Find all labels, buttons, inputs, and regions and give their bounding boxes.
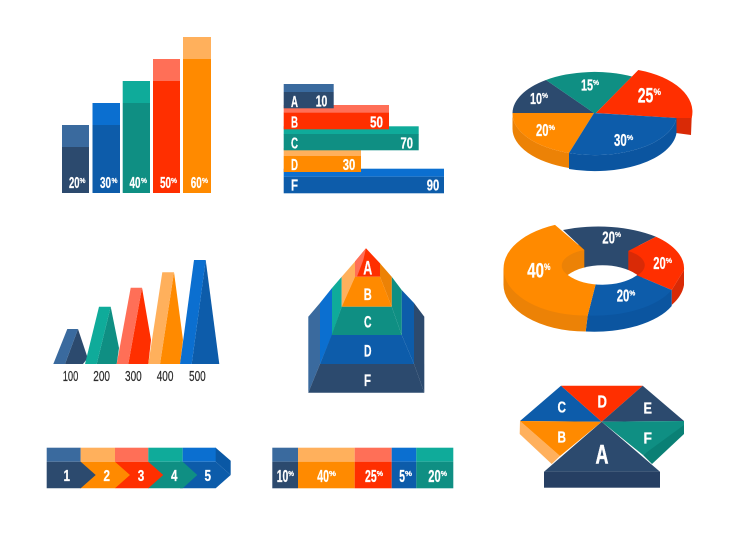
segment 25%: 25	[365, 466, 377, 486]
step 4: 4	[171, 468, 178, 485]
bar B 50: 50	[370, 114, 383, 131]
segment A: A	[596, 439, 608, 469]
panel: pyramid chart	[308, 248, 424, 393]
blue side	[586, 290, 672, 332]
bar 20%: %	[80, 176, 86, 185]
bar 40%	[123, 81, 150, 193]
step 3	[115, 462, 163, 488]
segment 25%: %	[377, 469, 383, 478]
segment C	[520, 386, 602, 422]
bar 50%	[153, 59, 180, 193]
segment 40%: %	[329, 469, 336, 478]
segment A	[544, 422, 660, 488]
axis labels: 200	[93, 369, 110, 385]
red exploded side	[676, 117, 692, 135]
panel: trapezoid chart	[53, 260, 219, 385]
red side	[672, 270, 684, 305]
slice 10%	[512, 80, 594, 113]
bar A 10	[284, 84, 334, 111]
orange side	[512, 113, 569, 168]
slice 25%: %	[654, 87, 661, 98]
bar 30%	[92, 103, 120, 193]
bar B 50	[284, 105, 389, 131]
step 5	[180, 462, 231, 488]
bar 40%: %	[141, 176, 147, 185]
axis labels: 100	[63, 369, 78, 385]
level B	[342, 277, 392, 307]
panel: 3D pie chart	[512, 70, 692, 171]
bar D 30: D	[291, 157, 298, 174]
slice 10%: 10	[530, 91, 542, 108]
bar 60%	[183, 37, 211, 193]
bar 20%	[62, 125, 89, 193]
pyramid teal sides	[332, 277, 402, 335]
donut hole	[568, 265, 637, 285]
trapezoid 400	[148, 272, 183, 364]
panel: vertical 3D bar chart	[62, 37, 211, 193]
step 3: 3	[138, 468, 144, 485]
slice 20%: 20	[536, 120, 549, 140]
panel: stacked percentage bar	[272, 448, 453, 488]
level D: D	[364, 342, 372, 361]
panel: arrow process bar	[47, 448, 231, 488]
slice 15%: %	[593, 78, 599, 87]
level A: A	[363, 258, 372, 279]
pyramid orange sides	[342, 262, 392, 307]
segment 40%: 40	[317, 466, 329, 486]
bar 20%: 20	[69, 175, 80, 192]
segment 5%: 5	[399, 466, 405, 486]
slice blue 20%: %	[629, 288, 636, 298]
bar B 50: B	[291, 114, 298, 131]
bar D 30: 30	[343, 157, 355, 174]
panel: hexagon segment chart	[520, 386, 684, 488]
blue side	[569, 118, 676, 171]
segment 5%: %	[405, 469, 412, 478]
bar 50%: %	[171, 176, 177, 185]
panel: horizontal 3D bar chart	[284, 84, 444, 195]
segment F: F	[644, 430, 652, 447]
slice 25%: 25	[638, 84, 654, 107]
segment E	[602, 386, 684, 422]
axis labels: 400	[157, 369, 173, 385]
bar 30%: %	[112, 176, 118, 185]
axis labels	[63, 369, 206, 385]
bar C 70: 70	[400, 135, 413, 152]
segment 40%	[298, 448, 355, 488]
segment B	[520, 421, 602, 464]
step 5: 5	[204, 468, 211, 485]
step 2: 2	[104, 468, 110, 485]
level C: C	[364, 312, 372, 331]
segment C: C	[558, 400, 566, 417]
slice 15%: 15	[581, 78, 593, 95]
step 4	[148, 462, 197, 488]
step 1	[47, 462, 96, 488]
slice red 20%: 20	[653, 253, 666, 273]
segment 5%	[392, 448, 416, 488]
pyramid navy sides	[308, 303, 424, 393]
segment 10%: 10	[277, 466, 288, 486]
slice 30%	[569, 113, 676, 155]
segment D	[561, 386, 643, 422]
hole inner walls	[552, 244, 652, 282]
level F	[308, 364, 424, 393]
segment 20%	[416, 448, 453, 488]
slice orange 40%: %	[544, 262, 551, 273]
orange side	[503, 268, 588, 332]
slice blue 20%	[588, 276, 672, 316]
bar F 90	[284, 169, 444, 195]
slice blue 20%: 20	[617, 286, 629, 306]
segment 20%: 20	[428, 466, 441, 486]
slice 25%	[596, 70, 692, 118]
step 1: 1	[64, 468, 70, 485]
segment B: B	[558, 430, 566, 447]
slice 20%	[512, 113, 594, 153]
slice navy 20%	[563, 226, 656, 251]
bar 50%: 50	[160, 175, 171, 192]
bar 60%: %	[202, 176, 208, 185]
trapezoid 500	[180, 260, 219, 364]
slice navy 20%: %	[615, 230, 621, 239]
bar 40%: 40	[130, 175, 141, 192]
segment E: E	[644, 400, 652, 417]
level B: B	[364, 285, 372, 304]
panel: 3D donut chart	[503, 225, 684, 332]
slice 10%: %	[542, 91, 548, 100]
step 2	[80, 462, 130, 488]
bar 30%: 30	[100, 175, 111, 192]
trapezoid 200	[85, 307, 119, 364]
trapezoid 100	[53, 329, 88, 364]
bar C 70: C	[291, 135, 298, 152]
axis labels: 500	[189, 369, 206, 385]
slice 30%: %	[627, 133, 634, 142]
bar 60%: 60	[191, 175, 202, 192]
bar D 30	[284, 148, 361, 174]
bar F 90: F	[291, 178, 298, 195]
slice orange 40%	[504, 225, 597, 316]
segment 10%	[272, 448, 298, 488]
slice red 20%	[628, 237, 684, 290]
segment 25%	[355, 448, 392, 488]
slice 30%: 30	[614, 130, 627, 150]
segment F	[602, 421, 684, 464]
pyramid blue sides	[320, 288, 414, 364]
level A	[355, 248, 380, 279]
slice 20%: %	[548, 123, 555, 132]
level C	[332, 307, 402, 335]
slice navy 20%: 20	[602, 227, 615, 247]
axis labels: 300	[125, 369, 142, 385]
level F: F	[364, 371, 371, 390]
bar F 90: 90	[427, 178, 439, 195]
segment 10%: %	[288, 469, 294, 478]
segment 20%: %	[441, 469, 447, 478]
slice orange 40%: 40	[527, 260, 544, 283]
level D	[320, 335, 414, 364]
bar A 10: 10	[316, 94, 327, 110]
slice red 20%: %	[666, 256, 672, 265]
bar A 10: A	[291, 94, 298, 111]
slice 15%	[546, 72, 632, 113]
top strip	[47, 448, 231, 475]
segment D: D	[598, 391, 607, 411]
bar C 70	[284, 126, 419, 152]
trapezoid 300	[117, 288, 151, 364]
